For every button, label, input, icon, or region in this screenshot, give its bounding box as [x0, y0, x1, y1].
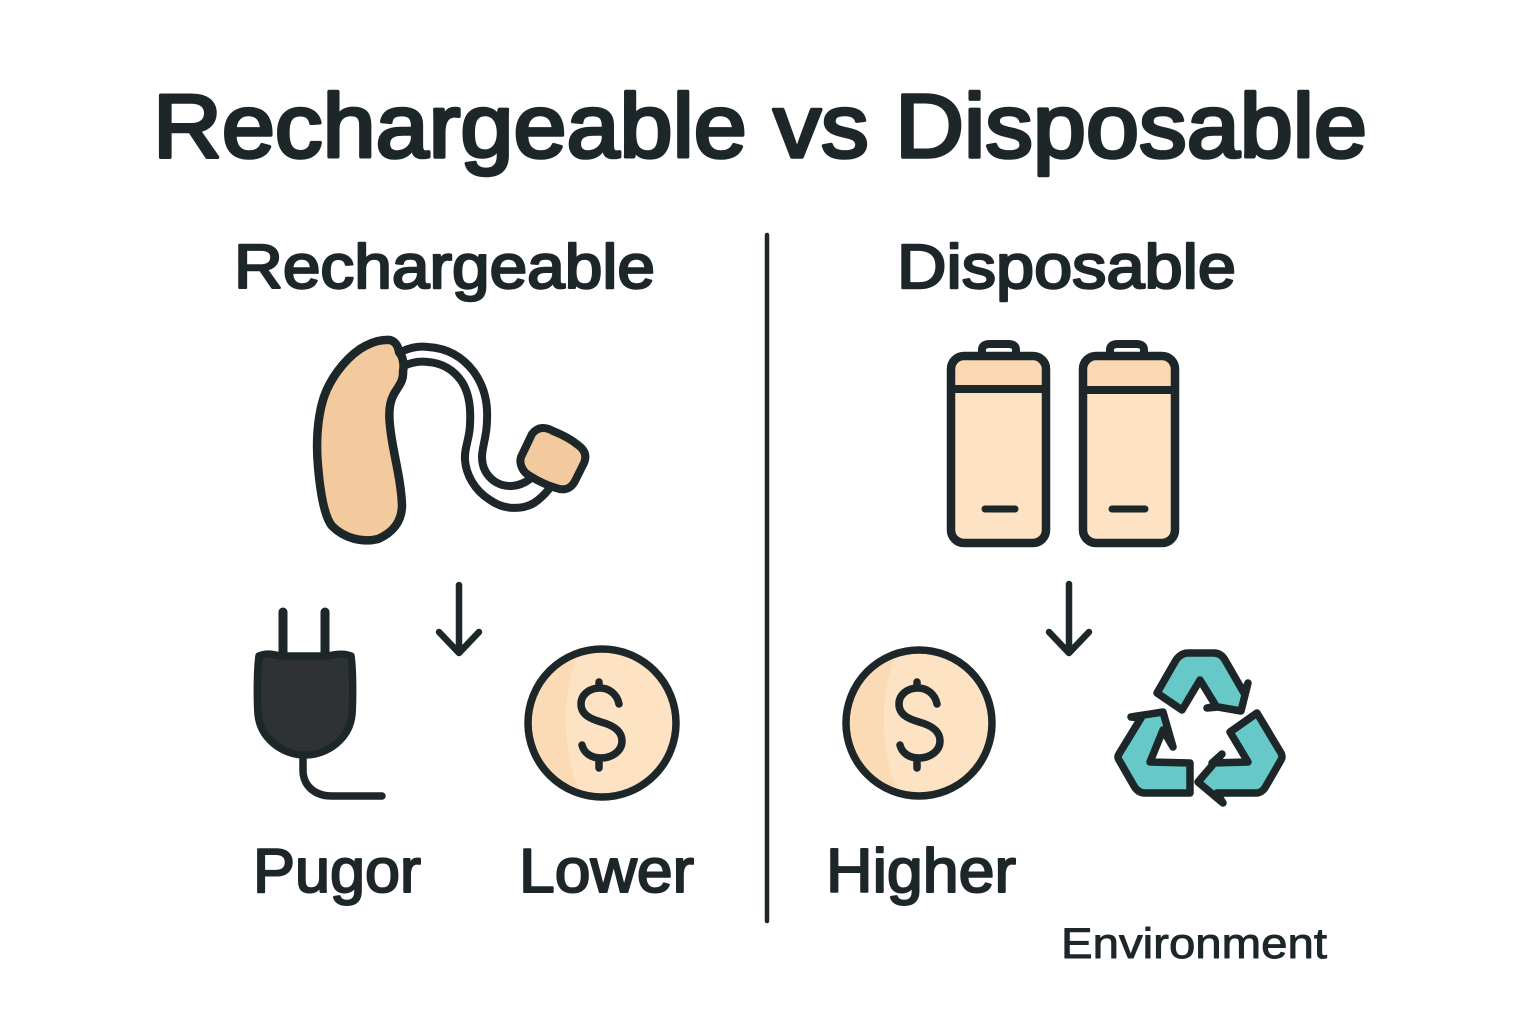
icon: hearing aid — [317, 340, 585, 540]
panel: disposable — [826, 233, 1327, 968]
heading: rechargeable: Rechargeable — [234, 233, 655, 302]
label: environment: Environment — [1061, 920, 1327, 968]
label: lower: Lower — [519, 837, 694, 906]
label: pugor: Pugor — [253, 837, 421, 906]
heading: disposable: Disposable — [897, 233, 1236, 302]
arrow: down — [439, 585, 479, 653]
label: higher: Higher — [826, 837, 1016, 906]
icon: dollar coin — [846, 650, 992, 796]
icon: plug — [257, 612, 382, 796]
panel: rechargeable — [234, 233, 694, 906]
arrow: down — [1049, 584, 1089, 653]
icon: batteries — [951, 344, 1175, 543]
title: Rechargeable vs Disposable — [153, 77, 1367, 177]
icon: dollar coin — [528, 649, 676, 797]
icon: recycling arrows — [1118, 653, 1282, 803]
